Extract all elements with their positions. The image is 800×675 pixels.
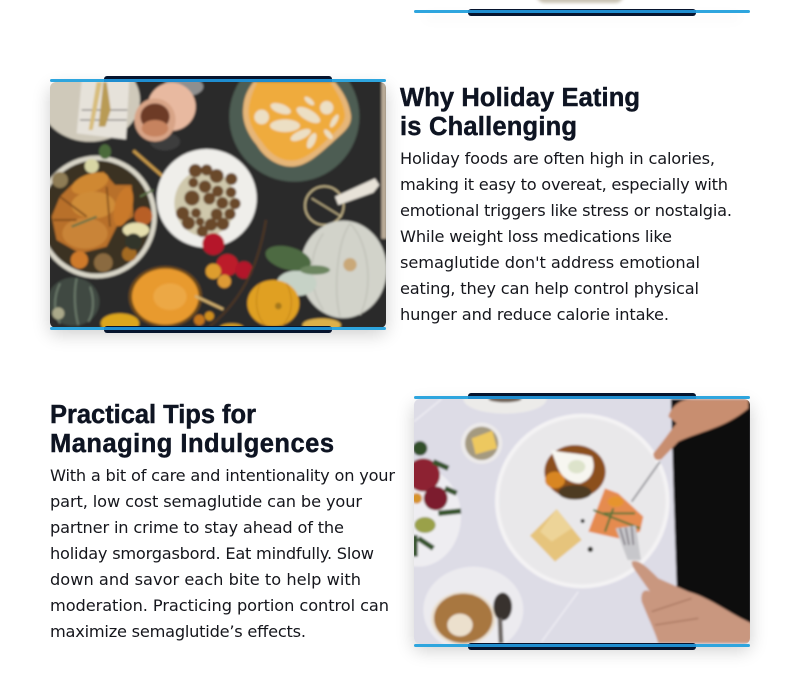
panel: plated meal photo — [406, 393, 758, 658]
dark accent bar bottom — [468, 643, 696, 650]
blue accent bar top — [50, 79, 386, 82]
top plate — [463, 384, 547, 414]
body text: hunger and reduce calorie intake. — [400, 305, 669, 324]
heading — [400, 84, 640, 141]
salmon dish — [588, 488, 643, 538]
small pumpkins and puree — [247, 280, 299, 327]
heading: Managing Indulgences — [50, 430, 334, 458]
dark accent bar top — [104, 76, 332, 83]
black clothing — [671, 399, 752, 625]
body text: part, low cost semaglutide can be your — [50, 492, 362, 511]
fruit plate — [376, 467, 461, 567]
blue accent bar — [414, 10, 750, 13]
body text: Holiday foods are often high in calories, — [400, 149, 715, 168]
bottom hand — [632, 561, 752, 643]
pie on slate — [229, 52, 359, 182]
photo: holiday feast — [50, 82, 386, 328]
top hand — [653, 399, 748, 460]
body text: semaglutide don't address emotional — [400, 253, 700, 272]
body text: maximize semaglutide’s effects. — [50, 622, 306, 641]
blue accent bar bottom — [414, 644, 750, 647]
body text: partner in crime to stay ahead of the — [50, 518, 344, 537]
heading: is Challenging — [400, 113, 577, 141]
dark accent bar — [468, 9, 696, 16]
blue accent bar bottom — [50, 327, 386, 330]
body text — [50, 466, 395, 641]
photo sliver — [536, 0, 624, 3]
blue accent bar top — [414, 396, 750, 399]
photo: plated meal — [414, 399, 750, 644]
image fragment from previous section — [414, 0, 750, 16]
white pumpkin — [300, 221, 387, 318]
hand and glass — [163, 77, 203, 97]
body text — [400, 149, 732, 324]
body text: moderation. Practicing portion control can — [50, 596, 389, 615]
text block: why holiday eating is challenging — [400, 84, 732, 324]
flowers — [202, 233, 224, 255]
turkey platter — [37, 156, 157, 278]
body text: emotional triggers like stress or nostalgia. — [400, 201, 732, 220]
heading — [50, 401, 334, 458]
poached egg dish — [544, 445, 606, 498]
body text: making it easy to overeat, especially with — [400, 175, 728, 194]
heading: Practical Tips for — [50, 401, 256, 429]
pastry — [530, 509, 582, 562]
mushroom plate — [133, 151, 178, 190]
candle — [305, 186, 344, 225]
body text: eating, they can help control physical — [400, 279, 699, 298]
coffee saucer — [423, 567, 523, 653]
butter dish — [461, 423, 502, 464]
fork — [616, 526, 641, 560]
dark accent bar bottom — [104, 326, 332, 333]
dark accent bar top — [468, 393, 696, 400]
body text: While weight loss medications like — [400, 227, 672, 246]
body text: With a bit of care and intentionality on your — [50, 466, 395, 485]
body text: holiday smorgasbord. Eat mindfully. Slow — [50, 544, 374, 563]
main plate — [495, 414, 670, 588]
shadow under frame — [424, 12, 740, 13]
heading: Why Holiday Eating — [400, 84, 640, 112]
text block: practical tips for managing indulgences — [50, 401, 396, 641]
top-left plate and napkin — [40, 58, 140, 142]
panel: holiday table photo — [42, 76, 394, 342]
body text: down and savor each bite to help with — [50, 570, 361, 589]
